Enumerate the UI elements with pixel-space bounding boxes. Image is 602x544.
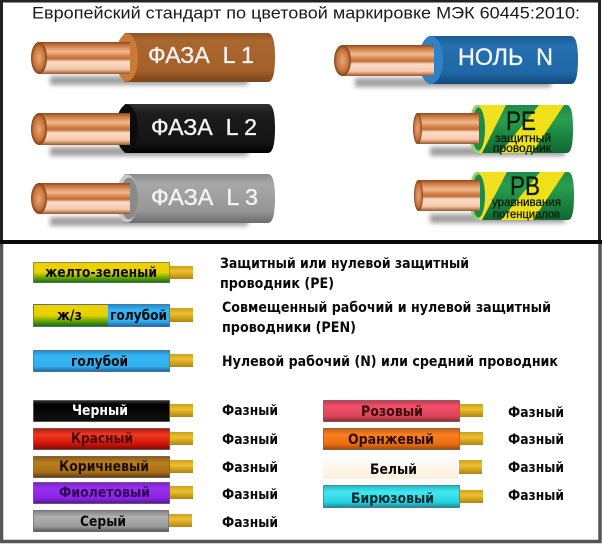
wire: yellow-green and blue: ж/з xyxy=(57,308,82,324)
label: phase 5: Фазный xyxy=(222,515,278,531)
wire: black: Черный xyxy=(72,403,128,419)
wire: orange: Оранжевый xyxy=(348,432,434,448)
wire: grey xyxy=(34,510,192,532)
cable: PB potential equalization conductor xyxy=(414,171,575,223)
description: N: Нулевой рабочий (N) или средний проводник xyxy=(222,354,558,370)
wire: white xyxy=(323,457,482,479)
wire: brown xyxy=(34,456,193,478)
wire: blue xyxy=(34,350,193,372)
striped jacket PB xyxy=(477,172,574,220)
divider xyxy=(0,240,602,244)
cable: PB potential equalization conductor: потенциалов xyxy=(493,207,560,221)
wire: turquoise: Бирюзовый xyxy=(351,491,434,507)
label: phase 2: Фазный xyxy=(222,432,278,448)
description: PEN: Совмещенный рабочий и нулевой защитный xyxy=(222,300,551,316)
wire: red: Красный xyxy=(71,431,133,447)
wire: red xyxy=(34,428,193,450)
wire: violet: Фиолетовый xyxy=(59,485,150,501)
label: phase 3: Фазный xyxy=(222,460,278,476)
wire: yellow-green and blue: голубой xyxy=(110,308,167,324)
striped jacket PE xyxy=(477,105,573,153)
cable: neutral N blue: НОЛЬ N xyxy=(458,44,553,71)
title: Европейский стандарт по цветовой маркировке МЭК 60445:2010: xyxy=(32,4,580,22)
description: PE: Защитный или нулевой защитный xyxy=(220,256,469,272)
label: phase 1: Фазный xyxy=(222,403,278,419)
cable: phase L1 brown: ФАЗА L 1 xyxy=(148,42,254,68)
description: PE xyxy=(220,256,469,292)
cable: PE protective conductor: PE xyxy=(506,106,536,136)
wire: orange xyxy=(324,428,483,450)
label: phase 8: Фазный xyxy=(508,460,564,476)
label: phase 9: Фазный xyxy=(508,488,564,504)
cable: phase L2 black: ФАЗА L 2 xyxy=(151,114,257,140)
wire: yellow-green xyxy=(34,262,193,282)
wire: yellow-green: желто-зеленый xyxy=(45,265,157,281)
cable: neutral N blue xyxy=(334,36,578,87)
wire: blue: голубой xyxy=(71,354,128,370)
wire: brown: Коричневый xyxy=(59,459,149,475)
description: PEN xyxy=(222,300,551,336)
label: phase 6: Фазный xyxy=(508,405,564,421)
description: PEN: проводники (PEN) xyxy=(222,320,356,336)
panel: top frame xyxy=(2,1,600,242)
wire: yellow-green and blue xyxy=(34,304,193,326)
cable: phase L2 black xyxy=(31,104,275,156)
label: phase 7: Фазный xyxy=(508,432,564,448)
cable: PB potential equalization conductor: уравнивания xyxy=(492,195,561,209)
wire: grey: Серый xyxy=(80,514,126,530)
cable: PE protective conductor: проводник xyxy=(493,141,552,155)
cable: phase L1 brown xyxy=(31,33,275,85)
description: PE: проводник (PE) xyxy=(220,276,334,292)
cable: PB potential equalization conductor: PB xyxy=(510,171,540,201)
panel: bottom frame xyxy=(2,242,600,542)
wire: pink: Розовый xyxy=(361,404,423,420)
wire: violet xyxy=(34,482,193,504)
wire: pink xyxy=(324,400,483,422)
cable: phase L3 grey: ФАЗА L 3 xyxy=(151,184,258,210)
wire: turquoise xyxy=(324,486,483,508)
label: phase 4: Фазный xyxy=(222,487,278,503)
wire: white: Белый xyxy=(370,462,417,478)
cable: PE protective conductor xyxy=(413,105,575,156)
cable: PE protective conductor: защитный xyxy=(495,131,551,145)
wire: black xyxy=(34,400,193,422)
cable: phase L3 grey xyxy=(31,174,275,226)
